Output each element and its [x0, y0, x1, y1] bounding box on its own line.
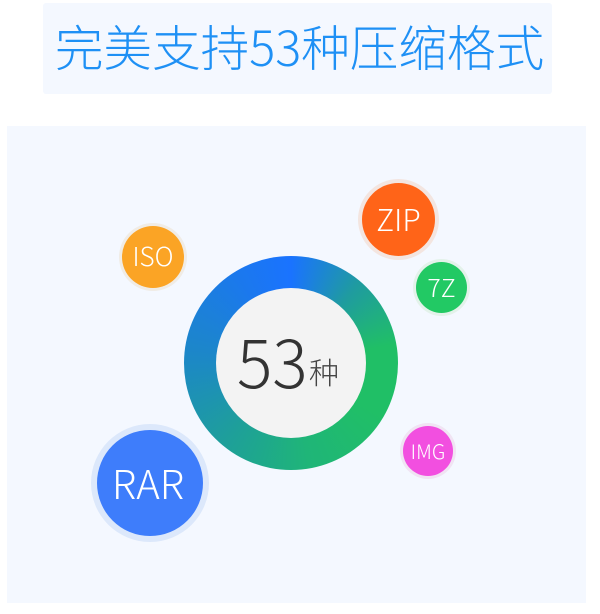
donut ring: 53 formats — [184, 256, 398, 470]
bubble: ISO — [122, 226, 184, 288]
number 53: 53 — [237, 312, 308, 408]
bubble: ZIP: ZIP — [376, 196, 421, 240]
bubble: 7Z: 7Z — [427, 269, 456, 305]
bubble: IMG — [403, 426, 453, 476]
bubble: IMG: IMG — [411, 436, 445, 465]
bubble: ZIP — [362, 183, 435, 256]
bubble: 7Z — [416, 262, 467, 313]
panel: formats — [7, 126, 586, 603]
title banner — [43, 3, 552, 94]
unit label: 种 — [309, 349, 339, 393]
bubble: ISO: ISO — [132, 237, 174, 274]
center disc — [216, 288, 366, 438]
title: 完美支持53种压缩格式 — [55, 10, 544, 80]
bubble: RAR: RAR — [112, 453, 184, 511]
bubble: RAR — [97, 430, 203, 536]
